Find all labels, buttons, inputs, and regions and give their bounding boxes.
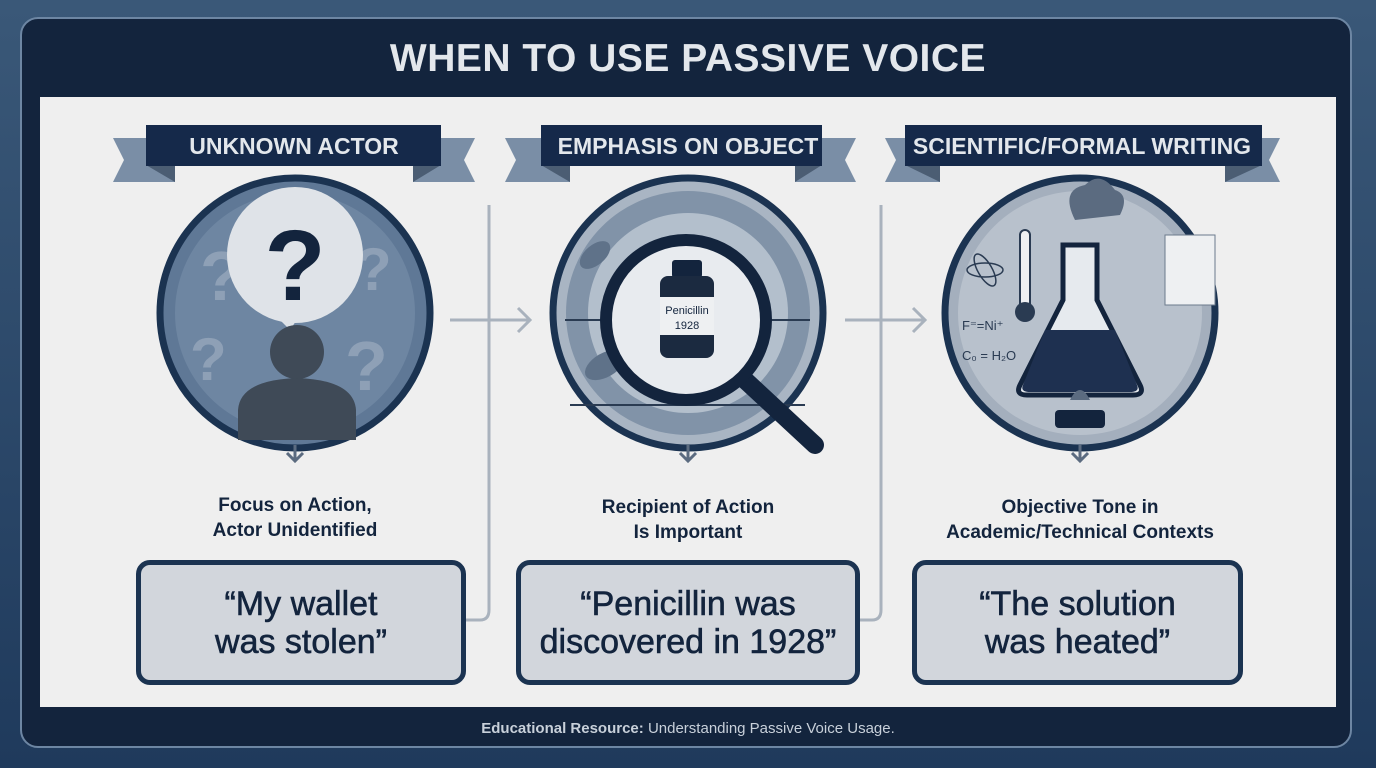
icon: unknown actor circle: ? xyxy=(190,326,227,393)
subtitle 1: Focus on Action, xyxy=(218,495,372,516)
ribbon 3 xyxy=(885,125,1280,182)
ribbon 1 xyxy=(113,125,475,182)
ribbon 3: SCIENTIFIC/FORMAL WRITING xyxy=(913,133,1251,159)
example box 2: “Penicillin was xyxy=(580,584,796,622)
icon: magnifier penicillin xyxy=(553,178,823,448)
icon: lab flask: C₀ = H₂O xyxy=(962,348,1016,363)
icon: unknown actor circle xyxy=(160,178,430,448)
icon: magnifier penicillin: Penicillin xyxy=(665,305,709,317)
connector lines xyxy=(450,205,925,620)
example box 3 xyxy=(912,560,1243,685)
content panel xyxy=(40,97,1336,707)
example box 1: was stolen” xyxy=(215,622,387,660)
title: WHEN TO USE PASSIVE VOICE xyxy=(390,37,986,80)
example box 2 xyxy=(516,560,860,685)
ribbon 1: UNKNOWN ACTOR xyxy=(189,133,399,159)
example box 1: “My wallet xyxy=(224,584,378,622)
example box 3: “The solution xyxy=(979,584,1176,622)
ribbon 2: EMPHASIS ON OBJECT xyxy=(558,133,818,159)
icon: unknown actor circle: ? xyxy=(200,237,243,315)
subtitle 1: Actor Unidentified xyxy=(213,520,377,541)
subtitle 3: Academic/Technical Contexts xyxy=(946,522,1214,543)
example box 1 xyxy=(136,560,466,685)
example box 2: discovered in 1928” xyxy=(540,622,836,660)
icon: lab flask: F⁼=Ni⁺ xyxy=(962,318,1004,333)
subtitle 2 xyxy=(602,497,774,543)
subtitle 1 xyxy=(213,495,377,541)
subtitle 2: Recipient of Action xyxy=(602,497,774,518)
icon: unknown actor circle: ? xyxy=(345,327,388,405)
ribbon 2 xyxy=(505,125,856,182)
footer: Educational Resource: Understanding Passive Voice Usage. xyxy=(481,720,895,737)
icon: magnifier penicillin: 1928 xyxy=(675,320,699,332)
subtitle 3: Objective Tone in xyxy=(1002,497,1158,518)
example box 3: was heated” xyxy=(985,622,1170,660)
icon: unknown actor circle: ? xyxy=(355,236,392,303)
icon: unknown actor circle: ? xyxy=(264,210,326,322)
icon: lab flask xyxy=(945,178,1215,448)
subtitle 3 xyxy=(946,497,1214,543)
subtitle 2: Is Important xyxy=(634,522,742,543)
down arrows xyxy=(287,445,1088,461)
